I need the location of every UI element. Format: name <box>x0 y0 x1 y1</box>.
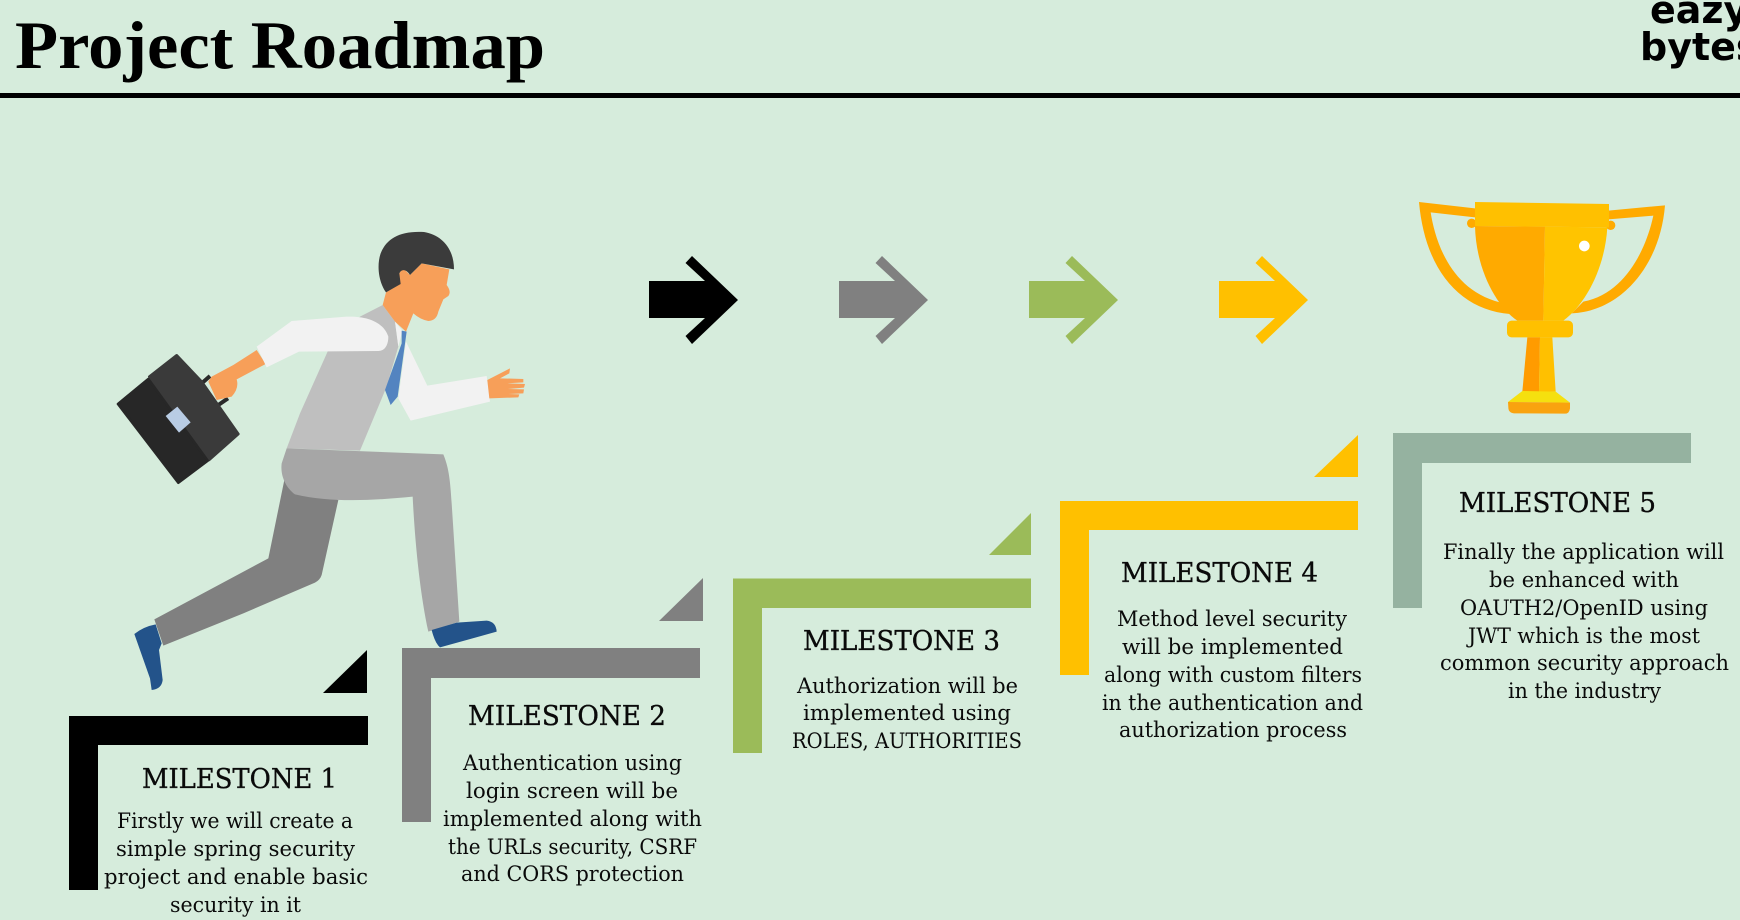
description <box>443 751 702 886</box>
neck and face <box>383 263 450 332</box>
tie <box>385 331 407 405</box>
vest <box>287 305 398 451</box>
right hand <box>487 368 525 398</box>
description: along with custom filters <box>1104 663 1362 687</box>
panel: milestone 5 <box>1393 433 1729 703</box>
corner triangle <box>323 650 367 693</box>
arrow 4 <box>1219 256 1308 344</box>
heading: MILESTONE 1 <box>142 764 337 795</box>
description: Authentication using <box>462 751 682 775</box>
description: the URLs security, CSRF <box>448 835 697 859</box>
description: login screen will be <box>466 779 678 803</box>
corner triangle <box>989 513 1031 555</box>
briefcase <box>118 355 238 483</box>
arrow 1 <box>649 256 738 344</box>
corner triangle <box>1314 435 1358 477</box>
logo <box>1640 0 1740 69</box>
panel: milestone 2 <box>402 578 703 886</box>
icon: trophy <box>1419 202 1665 414</box>
title: Project Roadmap <box>15 7 545 83</box>
heading: MILESTONE 2 <box>468 701 666 732</box>
description: JWT which is the most <box>1466 624 1701 648</box>
description: Authorization will be <box>796 674 1018 698</box>
corner bracket <box>402 648 700 822</box>
description: ROLES, AUTHORITIES <box>792 729 1022 753</box>
description: Firstly we will create a <box>117 809 353 833</box>
description: security in it <box>170 893 302 917</box>
description: in the authentication and <box>1102 691 1363 715</box>
description: common security approach <box>1440 651 1729 675</box>
shoes <box>134 621 497 690</box>
description: authorization process <box>1119 718 1347 742</box>
description: project and enable basic <box>104 865 368 889</box>
description: implemented along with <box>443 807 702 831</box>
left sleeve <box>257 317 388 367</box>
front leg <box>281 448 459 632</box>
corner triangle <box>659 578 703 621</box>
panel: milestone 3 <box>733 513 1031 753</box>
header <box>0 0 1740 98</box>
description: Method level security <box>1117 607 1347 631</box>
description: OAUTH2/OpenID using <box>1460 596 1708 620</box>
description <box>1440 540 1729 703</box>
description: be enhanced with <box>1489 568 1679 592</box>
figure: running businessman with briefcase <box>118 232 525 690</box>
briefcase handle <box>202 376 228 405</box>
description: implemented using <box>803 701 1011 725</box>
description: Finally the application will <box>1443 540 1724 564</box>
corner bracket <box>1393 433 1691 608</box>
heading: MILESTONE 4 <box>1121 558 1318 589</box>
corner bracket <box>1060 501 1358 675</box>
description: in the industry <box>1508 679 1661 703</box>
shirt and right arm <box>395 322 490 421</box>
corner bracket <box>69 716 368 890</box>
heading: MILESTONE 3 <box>803 626 1000 657</box>
panel: milestone 1 <box>69 650 368 917</box>
description <box>104 809 368 917</box>
description: and CORS protection <box>461 862 684 886</box>
heading: MILESTONE 5 <box>1459 488 1656 519</box>
description: simple spring security <box>116 837 355 861</box>
left forearm and fist <box>208 350 266 400</box>
back leg <box>154 480 338 646</box>
hair <box>379 232 454 292</box>
description: will be implemented <box>1122 635 1343 659</box>
panel: milestone 4 <box>1060 435 1363 742</box>
arrow 3 <box>1029 256 1118 344</box>
description <box>792 674 1022 753</box>
arrow 2 <box>839 256 928 344</box>
description <box>1102 607 1363 742</box>
corner bracket <box>733 578 1031 753</box>
